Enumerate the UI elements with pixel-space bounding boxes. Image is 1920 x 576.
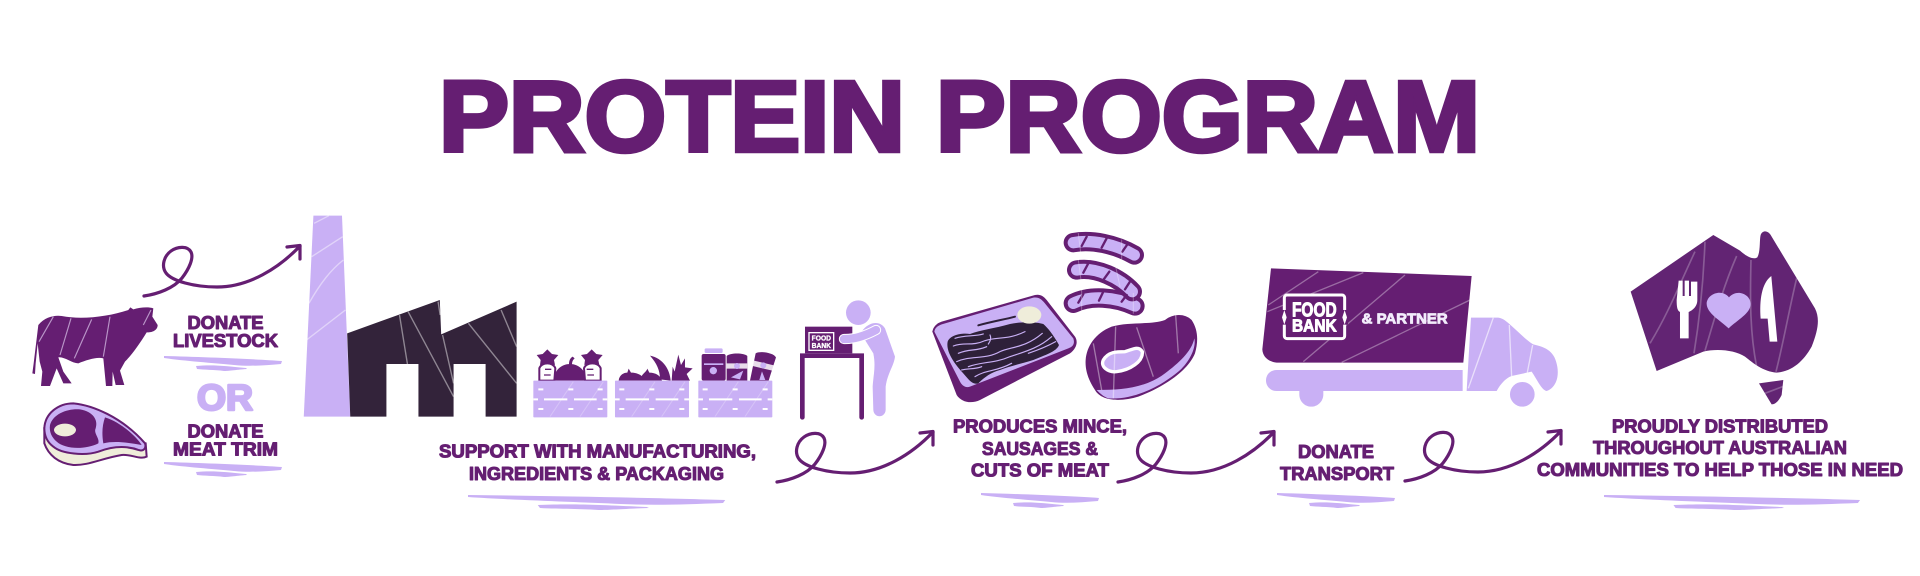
text: donate meat trim: DONATE bbox=[188, 422, 264, 442]
text: donate meat trim bbox=[164, 422, 282, 477]
title bbox=[439, 61, 1480, 173]
text: proudly distributed: THROUGHOUT AUSTRALIAN bbox=[1593, 437, 1847, 458]
icon: food bank truck: FOOD bbox=[1292, 299, 1337, 322]
icon: australia map with fork heart knife bbox=[1631, 231, 1818, 404]
icon: food bank truck: BANK bbox=[1292, 315, 1337, 335]
arrow: ingredients to products bbox=[777, 432, 933, 482]
text: proudly distributed bbox=[1537, 416, 1903, 510]
icon: food bank truck bbox=[1262, 268, 1558, 407]
text: support with manufacturing: INGREDIENTS & PACKAGING bbox=[469, 463, 724, 484]
title: PROTEIN bbox=[439, 61, 905, 173]
text: donate transport bbox=[1277, 441, 1395, 508]
icon: person packing food bank box: FOOD bbox=[812, 334, 831, 343]
arrow: transport to communities bbox=[1405, 430, 1561, 481]
icon: mince tray bbox=[932, 295, 1077, 402]
icon: person packing food bank box bbox=[802, 300, 895, 417]
arrow: livestock to factory bbox=[144, 246, 300, 296]
text: proudly distributed: COMMUNITIES TO HELP THOSE IN NEED bbox=[1537, 459, 1903, 480]
text: produces mince sausages cuts of meat: CUTS OF MEAT bbox=[971, 460, 1110, 481]
icon: crate with pumpkins and greens bbox=[615, 355, 693, 417]
icon: sausages bbox=[1073, 233, 1135, 313]
icon: food bank truck: & PARTNER bbox=[1362, 312, 1448, 328]
icon: person packing food bank box: BANK bbox=[812, 341, 832, 350]
icon: crate with jar and cans bbox=[698, 348, 776, 417]
icon: cow bbox=[32, 307, 158, 386]
text: proudly distributed: PROUDLY DISTRIBUTED bbox=[1612, 416, 1828, 437]
text: produces mince sausages cuts of meat: SAUSAGES & bbox=[982, 438, 1098, 459]
arrow: products to transport bbox=[1118, 432, 1274, 482]
text: donate transport: DONATE bbox=[1298, 441, 1374, 462]
text: donate transport: TRANSPORT bbox=[1280, 463, 1395, 484]
text: donate livestock: DONATE bbox=[188, 313, 264, 333]
text: produces mince sausages cuts of meat: PRODUCES MINCE, bbox=[953, 416, 1127, 437]
icon: cut of meat bbox=[1086, 315, 1197, 400]
icon: factory bbox=[304, 216, 517, 417]
icon: crate with carrots and pumpkin bbox=[533, 349, 607, 417]
title: PROGRAM bbox=[936, 61, 1480, 173]
text: support with manufacturing: SUPPORT WITH MANUFACTURING, bbox=[439, 441, 756, 462]
text: support with manufacturing bbox=[439, 441, 756, 510]
icon: steak bbox=[44, 403, 147, 465]
text: produces mince sausages cuts of meat bbox=[953, 416, 1127, 508]
text: or: OR bbox=[197, 377, 253, 418]
text: donate livestock: LIVESTOCK bbox=[173, 331, 278, 351]
text: donate meat trim: MEAT TRIM bbox=[173, 440, 278, 460]
text: donate livestock bbox=[164, 313, 282, 371]
